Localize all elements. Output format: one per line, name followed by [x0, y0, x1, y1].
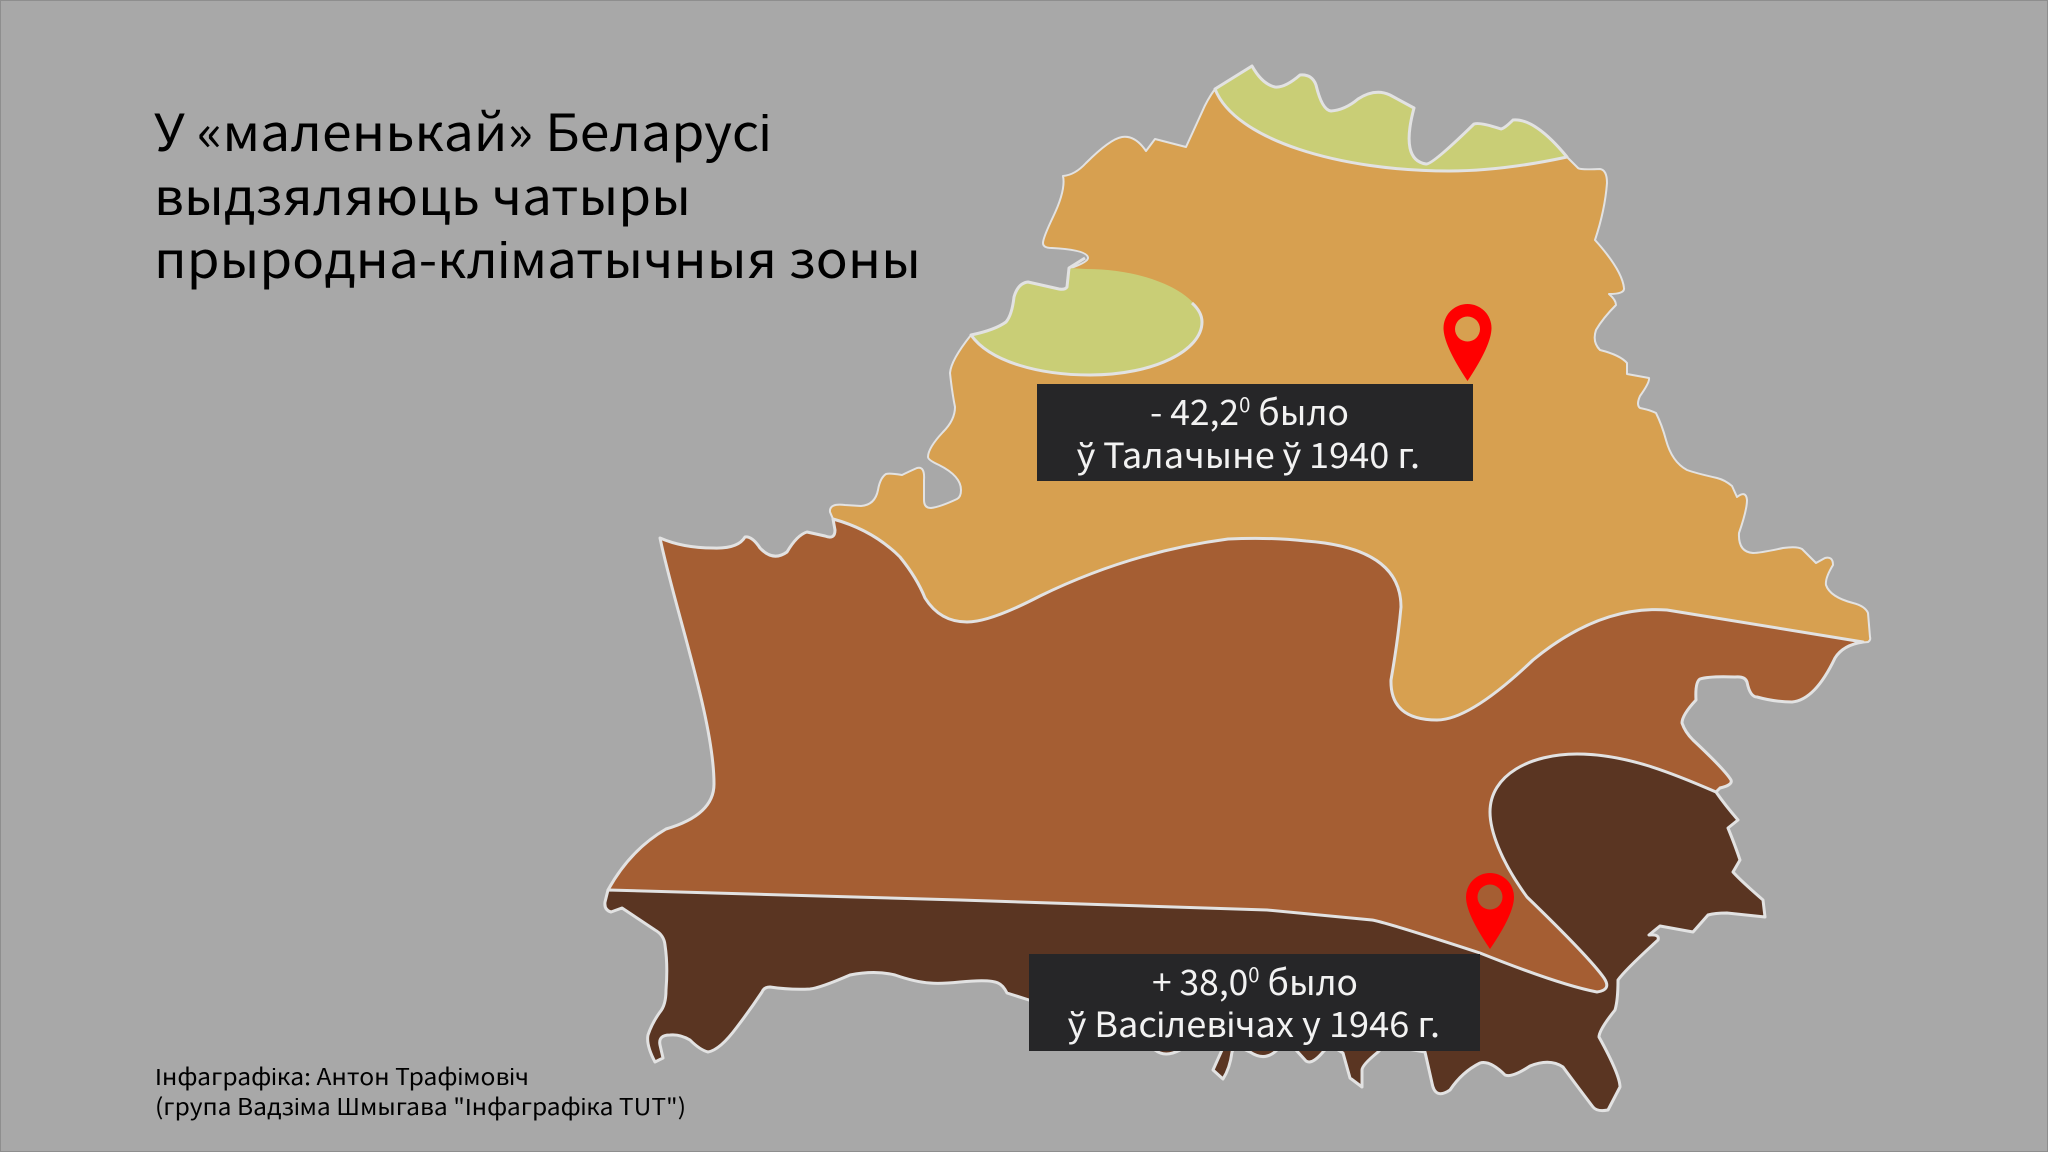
zone: orange central: [830, 89, 1870, 760]
map of Belarus: [605, 66, 1870, 1111]
callout: hottest record: ў Васілевічах у 1946 г.: [1068, 997, 1440, 1048]
credit: Інфаграфіка: Антон Трафімовіч: [155, 1058, 529, 1092]
callout: hottest record: было: [1260, 955, 1358, 1006]
callout: coldest record: 0: [1239, 389, 1250, 418]
zone: dark south: [605, 754, 1765, 1111]
callout: hottest record: + 38,0: [1152, 955, 1247, 1006]
callout: coldest record: [1037, 384, 1473, 481]
zone: green north: [1215, 66, 1567, 171]
title: У «маленькай» Беларусі: [154, 92, 771, 166]
zone: brown central: [608, 519, 1863, 1000]
pin: Vasilevichy: [1466, 873, 1514, 949]
title: выдзяляюць чатыры: [154, 156, 691, 230]
title: прыродна-кліматычныя зоны: [154, 219, 921, 293]
callout: coldest record: ў Талачыне ў 1940 г.: [1077, 428, 1420, 479]
title: [154, 92, 921, 293]
callout: coldest record: было: [1250, 385, 1349, 436]
pin: Talachyn: [1444, 304, 1492, 381]
credit: [155, 1058, 686, 1122]
callout: hottest record: 0: [1248, 959, 1260, 988]
zone: green west: [971, 258, 1202, 375]
credit: (група Вадзіма Шмыгава "Інфаграфіка TUT"): [155, 1088, 686, 1122]
callout: coldest record: - 42,2: [1150, 385, 1238, 436]
callout: hottest record: [1029, 954, 1480, 1051]
